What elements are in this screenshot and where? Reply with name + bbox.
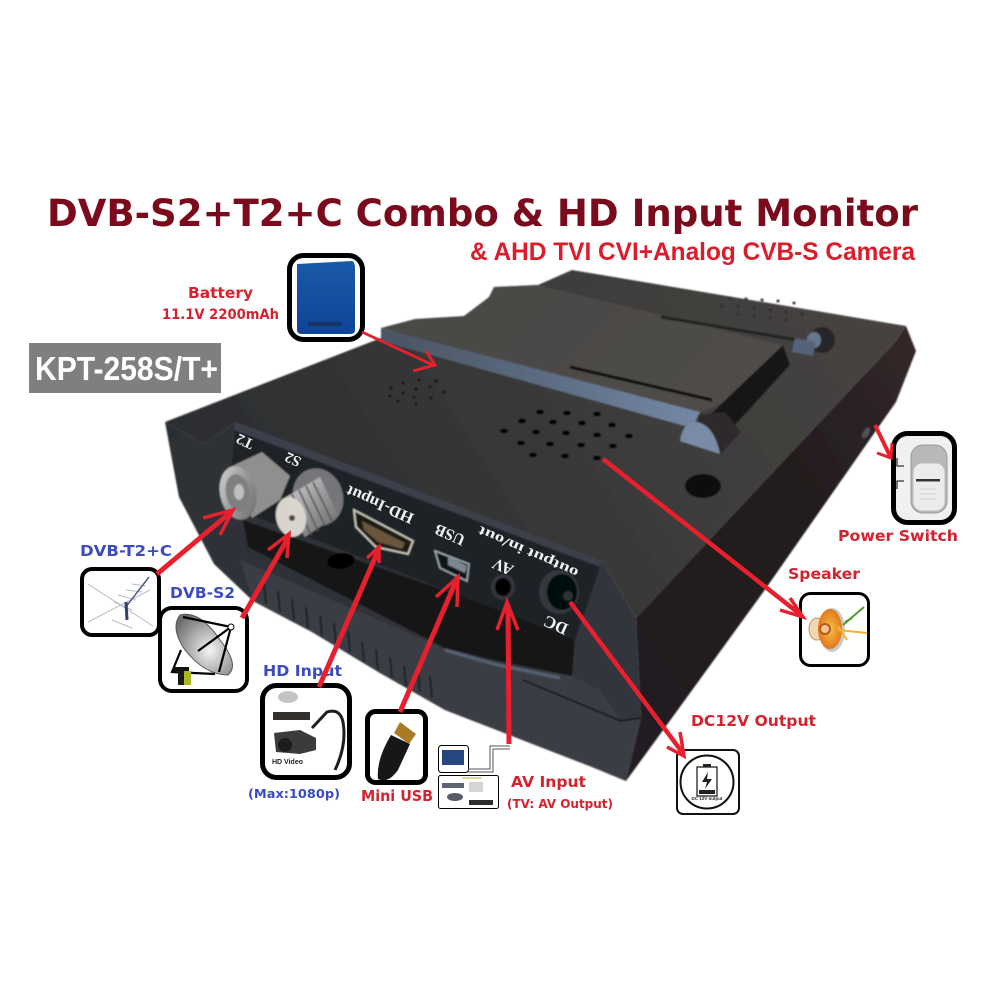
cover plate <box>381 285 783 412</box>
arrow: AV input <box>497 602 518 744</box>
HD Input label: HD Input <box>263 662 342 680</box>
arrow: DC output <box>570 602 684 756</box>
groove line <box>523 680 641 721</box>
panel labels: USB <box>432 520 468 548</box>
panel labels: output in/out <box>476 522 581 580</box>
icon: speaker <box>800 594 868 666</box>
icon: power switch <box>894 434 954 522</box>
hinge right <box>809 327 835 353</box>
panel labels: S2 <box>283 448 304 469</box>
arrow: power switch <box>875 425 892 458</box>
panel labels: HD-Input <box>343 481 417 527</box>
skirt ribs <box>264 583 432 698</box>
battery cover <box>381 285 835 455</box>
hinge left <box>698 412 741 455</box>
connector panel <box>228 422 602 640</box>
device front body <box>165 422 641 781</box>
T2 connector <box>215 452 290 523</box>
DVB-T2 label: DVB-T2+C <box>80 542 172 560</box>
panel labels: DC <box>541 611 571 639</box>
lower shell <box>240 560 641 781</box>
battery label <box>162 284 279 323</box>
Speaker label: Speaker <box>788 565 861 583</box>
max resolution note: (Max:1080p) <box>248 787 340 801</box>
title: DVB-S2+T2+C Combo & HD Input Monitor <box>47 192 919 235</box>
arrow: speaker <box>603 459 803 617</box>
AV Input label: AV Input <box>511 773 586 791</box>
device photo <box>165 270 916 781</box>
cover slots <box>570 367 712 400</box>
icon: mini USB plug <box>368 712 426 782</box>
side hole on top <box>685 474 721 498</box>
cover blue edge <box>381 328 700 426</box>
Power Switch label: Power Switch <box>838 527 958 545</box>
screw hole <box>326 552 356 570</box>
panel labels <box>234 430 581 639</box>
icon: DC output <box>677 750 739 814</box>
rear speaker dots <box>720 296 804 322</box>
arrow: HD input <box>319 547 379 687</box>
DC jack <box>539 570 579 614</box>
panel upper bevel <box>234 422 602 567</box>
device right face <box>626 326 916 781</box>
panel labels: AV <box>490 554 516 578</box>
USB port <box>435 551 469 581</box>
model badge <box>29 343 221 393</box>
icon: antenna <box>82 569 159 635</box>
S2 connector <box>272 462 351 540</box>
icon: HD sources <box>262 686 350 778</box>
DVB-S2 label: DVB-S2 <box>170 584 235 602</box>
icon: satellite dish <box>160 608 247 691</box>
arrow: battery <box>362 332 435 371</box>
HDMI port <box>354 510 413 554</box>
battery label: Battery <box>188 284 253 302</box>
Mini USB label: Mini USB <box>361 787 433 805</box>
arrow: DVB-S2 <box>242 534 289 618</box>
DC label: DC12V Output <box>691 712 816 730</box>
arrow: DVB-T2 <box>157 510 233 574</box>
arrow: Mini USB <box>400 577 458 712</box>
panel labels: T2 <box>234 430 257 452</box>
battery label: 11.1V 2200mAh <box>162 307 279 323</box>
model badge: KPT-258S/T+ <box>35 350 218 387</box>
AV output note: (TV: AV Output) <box>507 797 613 811</box>
cover shadow <box>705 345 790 425</box>
icon: DC output: DC 12V output <box>692 796 723 801</box>
subtitle: & AHD TVI CVI+Analog CVB-S Camera <box>470 238 916 266</box>
highlight on shell <box>445 650 560 678</box>
AV jack <box>491 574 515 600</box>
speaker grille main <box>500 410 633 460</box>
recess below connector panel <box>243 520 575 676</box>
side switch slot <box>860 426 872 440</box>
icon: battery <box>290 256 362 340</box>
icon: AV connection diagram <box>438 746 510 808</box>
speaker grille left <box>388 378 446 406</box>
device top face <box>165 270 906 618</box>
icon: HD sources: HD Video <box>272 759 303 766</box>
